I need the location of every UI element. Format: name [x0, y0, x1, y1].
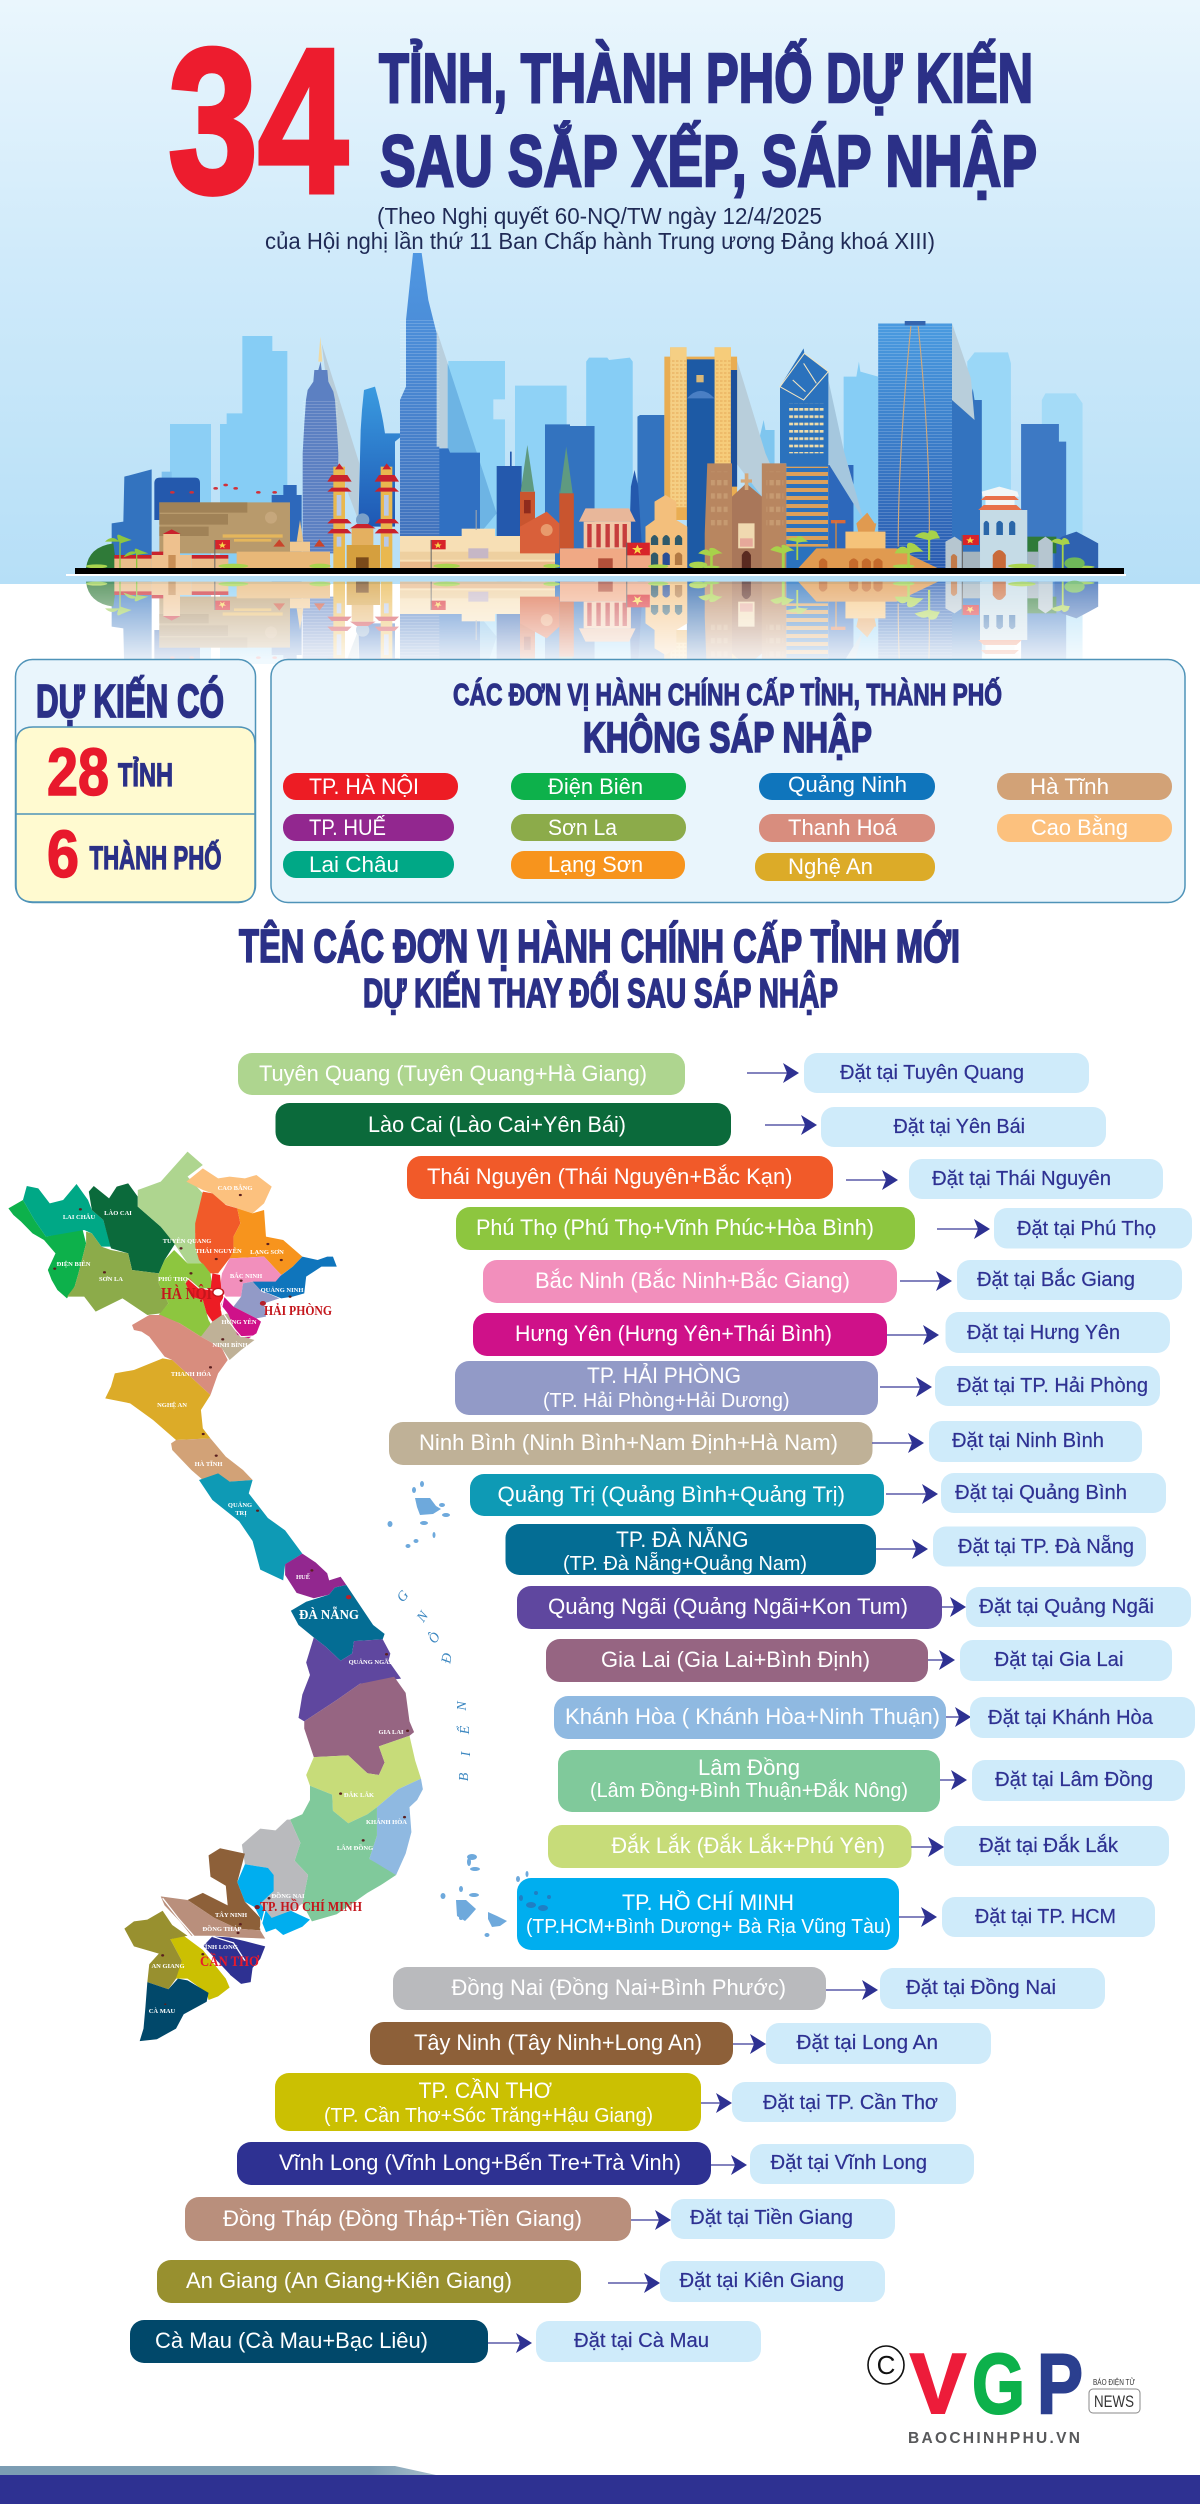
destination: [671, 2199, 895, 2239]
arrow: [946, 1707, 971, 1727]
arrow: [876, 1539, 928, 1559]
islands overlapping the Ho Chi Minh bar: [519, 1891, 551, 1911]
stat: 6 cities: 6: [47, 817, 79, 892]
letters VGP: P: [1037, 2337, 1083, 2432]
pill: Lai Chau: [283, 851, 454, 878]
copyright symbol: C: [877, 2350, 895, 2380]
bar: [185, 2197, 631, 2241]
bar: An Giang (An Giang+Kiên Giang): [186, 2268, 512, 2293]
destination: [766, 2023, 991, 2064]
map labels: TRỊ: [235, 1510, 247, 1517]
pill: Quang Ninh: [759, 772, 935, 800]
pill: Cao Bang: Cao Bằng: [1031, 815, 1128, 840]
destination: Đặt tại Quảng Ngãi: [979, 1596, 1154, 1618]
bar: Phú Thọ (Phú Thọ+Vĩnh Phúc+Hòa Bình): [476, 1215, 874, 1240]
map of Vietnam: [8, 1152, 529, 2041]
bar: [455, 1361, 878, 1415]
bar: [517, 1586, 942, 1629]
destination: [536, 2321, 761, 2362]
arrow: [631, 2210, 671, 2230]
bar: [389, 1422, 872, 1465]
map labels: KHÁNH HÒA: [366, 1818, 407, 1826]
bar: Gia Lai (Gia Lai+Bình Định): [601, 1647, 870, 1672]
bar: Đồng Nai (Đồng Nai+Bình Phước): [452, 1975, 786, 2000]
bar: Đắk Lắk (Đắk Lắk+Phú Yên): [612, 1833, 885, 1858]
news badge: [1089, 2376, 1140, 2413]
destination: Đặt tại Đồng Nai: [906, 1977, 1056, 1999]
map labels: TUYÊN QUANG: [163, 1237, 211, 1245]
row: Hung Yen: [473, 1312, 1170, 1356]
subtitle: của Hội nghị lần thứ 11 Ban Chấp hành Trung ương Đảng khoá XIII): [265, 228, 935, 254]
heading: khong sap nhap: KHÔNG SÁP NHẬP: [583, 713, 872, 762]
arrow: [887, 1325, 939, 1345]
destination: [972, 1760, 1185, 1801]
destination: [957, 1260, 1182, 1300]
map labels: ĐỒNG THÁP: [202, 1925, 242, 1933]
destination: [966, 1587, 1191, 1627]
map labels: HUẾ: [296, 1573, 310, 1581]
row: Thai Nguyen: [407, 1156, 1163, 1199]
arrow: [899, 1907, 937, 1927]
bar: Khánh Hòa ( Khánh Hòa+Ninh Thuận): [565, 1704, 940, 1729]
pill: Nghe An: [755, 853, 935, 881]
bar: [237, 2142, 711, 2185]
destination: Đặt tại Phú Thọ: [1017, 1218, 1156, 1240]
map labels: CẦN THƠ: [200, 1953, 259, 1970]
arrow: [846, 1170, 898, 1190]
map labels: NGHỆ AN: [157, 1401, 187, 1409]
map labels: PHÚ THỌ: [158, 1275, 188, 1283]
arrow: [826, 1980, 878, 2000]
bar: (TP.HCM+Bình Dương+ Bà Rịa Vũng Tàu): [526, 1916, 891, 1938]
map: north and north central regions: [8, 1152, 337, 1580]
islands: Hoang Sa: [388, 1481, 450, 1548]
pill: Ha Tinh: [997, 773, 1172, 800]
letters VGP: G: [972, 2337, 1025, 2432]
destination: [960, 1640, 1172, 1681]
sea label: Bien Dong: G: [394, 1588, 412, 1605]
ground line: [66, 568, 1126, 576]
bar: [506, 1524, 876, 1575]
map labels: [57, 1184, 407, 2015]
arrow: [900, 1271, 952, 1291]
pill: Lang Son: Lạng Sơn: [548, 852, 643, 877]
bar: [546, 1639, 928, 1682]
pill: Ha Noi: [283, 773, 458, 800]
arrow: [872, 1433, 924, 1453]
subtitle: [265, 203, 935, 254]
pill: Thanh Hoa: Thanh Hoá: [788, 815, 898, 840]
pill: Cao Bang: [997, 814, 1172, 842]
sea label: Bien Dong: I: [459, 1750, 474, 1757]
map labels: HƯNG YÊN: [221, 1318, 257, 1326]
bar: (TP. Hải Phòng+Hải Dương): [543, 1390, 790, 1412]
big number 34: 34: [168, 6, 348, 236]
letters VGP: V: [910, 2337, 966, 2432]
pill: Dien Bien: Điện Biên: [548, 774, 643, 799]
destination: [880, 1968, 1105, 2009]
row: Dong Thap: [185, 2197, 895, 2241]
row: Lao Cai: [276, 1103, 1106, 1147]
bar: [370, 2022, 733, 2065]
destination: Đặt tại Vĩnh Long: [770, 2152, 927, 2174]
pill: Hue: [283, 814, 454, 841]
bar: Vĩnh Long (Vĩnh Long+Bến Tre+Trà Vinh): [279, 2150, 681, 2175]
destination: Đặt tại Ninh Bình: [952, 1430, 1104, 1452]
panel: units not merged: [271, 660, 1185, 902]
row: Tay Ninh: [370, 2022, 991, 2065]
arrow: [765, 1115, 817, 1135]
destination: [970, 1697, 1195, 1738]
bar: [558, 1750, 940, 1812]
pill: Quang Ninh: Quảng Ninh: [788, 772, 907, 797]
bar: TP. CẦN THƠ: [418, 2078, 552, 2103]
map labels: NINH BÌNH: [212, 1341, 248, 1349]
map labels: THÁI NGUYÊN: [195, 1247, 242, 1255]
map labels: QUẢNG NGÃI: [349, 1658, 392, 1666]
sea label: Bien Dong: Đ: [439, 1652, 456, 1666]
bar: TP. HỒ CHÍ MINH: [622, 1890, 794, 1915]
skyline illustration: [86, 253, 1098, 569]
news badge: NEWS: [1094, 2392, 1134, 2411]
title: [379, 38, 1037, 202]
map labels: ĐÀ NẴNG: [299, 1605, 359, 1623]
map labels: VĨNH LONG: [200, 1943, 238, 1951]
heading: du kien co: DỰ KIẾN CÓ: [36, 675, 224, 727]
bar: Cà Mau (Cà Mau+Bạc Liêu): [155, 2328, 428, 2353]
sea label: Bien Dong: N: [455, 1701, 470, 1712]
bar: [393, 1967, 826, 2010]
copyright symbol: [868, 2346, 904, 2384]
arrow: [733, 2034, 766, 2054]
bar: [473, 1313, 887, 1356]
pill: Lang Son: [511, 851, 685, 879]
destination: [660, 2261, 885, 2302]
bar: Lào Cai (Lào Cai+Yên Bái): [368, 1112, 626, 1137]
destination: [946, 1312, 1170, 1353]
pill: Dien Bien: [511, 773, 686, 800]
row: Ninh Binh: [389, 1421, 1142, 1465]
row: Dong Nai: [393, 1967, 1105, 2010]
map labels: HÀ TĨNH: [195, 1460, 222, 1468]
destination: [994, 1208, 1192, 1248]
map labels: AN GIANG: [151, 1963, 185, 1970]
bar: Bắc Ninh (Bắc Ninh+Bắc Giang): [535, 1268, 850, 1293]
map labels: LẠNG SƠN: [250, 1249, 284, 1256]
row: An Giang: [157, 2260, 885, 2303]
destination: Đặt tại Cà Mau: [574, 2330, 709, 2352]
map labels: QUẢNG NINH: [261, 1286, 303, 1294]
bar: Tây Ninh (Tây Ninh+Long An): [414, 2030, 702, 2055]
letters VGP: [910, 2337, 1083, 2432]
destination: [909, 1159, 1163, 1199]
bar: [548, 1825, 912, 1868]
destination: Đặt tại Thái Nguyên: [932, 1168, 1111, 1190]
arrow: [880, 1377, 932, 1397]
destination: Đặt tại Long An: [796, 2032, 938, 2054]
pill: Ha Noi: TP. HÀ NỘI: [309, 774, 419, 799]
skyline: right half: [560, 321, 1098, 569]
bar: [470, 1474, 884, 1516]
arrow: [937, 1219, 990, 1239]
skyline reflection: [86, 580, 1098, 664]
bar: Tuyên Quang (Tuyên Quang+Hà Giang): [259, 1061, 647, 1086]
stat: 28 provinces: TỈNH: [118, 757, 173, 793]
bar: [275, 2073, 701, 2131]
bar: (TP. Đà Nẵng+Quảng Nam): [563, 1552, 807, 1575]
row: Hai Phong: [455, 1361, 1160, 1415]
destination: [941, 1473, 1166, 1513]
destination: Đặt tại TP. Cần Thơ: [763, 2092, 938, 2114]
destination: Đặt tại Kiên Giang: [680, 2270, 844, 2292]
row: Quang Tri: [470, 1473, 1166, 1516]
destination: Đặt tại Hưng Yên: [967, 1322, 1120, 1344]
news badge: BÁO ĐIỆN TỬ: [1093, 2376, 1135, 2387]
bar: [517, 1878, 899, 1950]
pill: Hue: TP. HUẾ: [309, 815, 386, 840]
stat: 6 cities: THÀNH PHỐ: [90, 840, 222, 876]
skyline: left half: [86, 253, 572, 568]
destination: Đặt tại Đắk Lắk: [979, 1834, 1119, 1857]
map labels: ĐỒNG NAI: [271, 1892, 305, 1900]
map: south central and south regions: [124, 1554, 423, 2041]
destination: Đặt tại Yên Bái: [894, 1116, 1025, 1138]
destination: [933, 1526, 1146, 1566]
heading: administrative units: CÁC ĐƠN VỊ HÀNH CHÍNH CẤP TỈNH, THÀNH PHỐ: [453, 676, 1002, 712]
subtitle: (Theo Nghị quyết 60-NQ/TW ngày 12/4/2025: [377, 203, 822, 229]
islands: Truong Sa: [440, 1854, 528, 1937]
arrow: [886, 1484, 938, 1504]
destination: Đặt tại TP. Hải Phòng: [957, 1375, 1148, 1397]
stat: 6 cities: [47, 817, 222, 892]
map labels: BẮC NINH: [230, 1272, 262, 1280]
row: Tuyen Quang: [238, 1053, 1089, 1095]
row: Phu Tho: [456, 1207, 1192, 1250]
map labels: CAO BẰNG: [218, 1184, 252, 1192]
bar: [554, 1696, 946, 1739]
arrow: [747, 1063, 799, 1083]
bar: Quảng Trị (Quảng Bình+Quảng Trị): [498, 1482, 845, 1507]
destination: Đặt tại Bắc Giang: [977, 1268, 1135, 1291]
destination: Đặt tại TP. HCM: [975, 1906, 1116, 1928]
bar: Đồng Tháp (Đồng Tháp+Tiền Giang): [223, 2206, 582, 2231]
site name: BAOCHINHPHU.VN: [908, 2430, 1080, 2447]
bar: Hưng Yên (Hưng Yên+Thái Bình): [515, 1321, 832, 1346]
destination: Đặt tại Lâm Đồng: [995, 1769, 1153, 1791]
arrow: [942, 1597, 966, 1617]
section heading: [239, 920, 960, 1016]
destination: [929, 1421, 1142, 1462]
arrow: [911, 1837, 944, 1857]
destination: [804, 1053, 1089, 1093]
bar: Thái Nguyên (Thái Nguyên+Bắc Kạn): [427, 1164, 792, 1189]
box: totals: [16, 727, 255, 902]
pill: Lai Chau: Lai Châu: [309, 852, 399, 877]
bar: [276, 1103, 731, 1146]
stat: 28 provinces: 28: [47, 735, 109, 810]
destination: Đặt tại TP. Đà Nẵng: [958, 1535, 1134, 1558]
map labels: CÀ MAU: [149, 2007, 176, 2015]
pill: Ha Tinh: Hà Tĩnh: [1030, 774, 1109, 799]
map labels: LÂM ĐỒNG: [337, 1844, 373, 1852]
bar: Lâm Đồng: [698, 1755, 800, 1780]
row: Vinh Long: [237, 2142, 974, 2185]
map labels: ĐIỆN BIÊN: [57, 1260, 91, 1268]
arrow: [928, 1650, 955, 1670]
bar: Quảng Ngãi (Quảng Ngãi+Kon Tum): [548, 1594, 908, 1619]
arrow: [608, 2273, 660, 2293]
map labels: GIA LAI: [378, 1729, 404, 1736]
map labels: SƠN LA: [99, 1276, 123, 1283]
map labels: HÀ NỘI: [161, 1284, 212, 1303]
destination: Đặt tại Tiền Giang: [690, 2207, 853, 2229]
pill: Nghe An: Nghệ An: [788, 854, 873, 879]
bar: (TP. Cần Thơ+Sóc Trăng+Hậu Giang): [324, 2105, 653, 2127]
bar: [483, 1260, 897, 1303]
destination: Đặt tại Tuyên Quang: [840, 1062, 1024, 1084]
row: Ho Chi Minh: [517, 1878, 1155, 1950]
map labels: LAI CHÂU: [63, 1213, 95, 1221]
row: Quang Ngai: [517, 1586, 1191, 1629]
section heading: DỰ KIẾN THAY ĐỔI SAU SÁP NHẬP: [363, 969, 838, 1016]
map labels: ĐẮK LẮK: [344, 1791, 374, 1799]
bar: [157, 2260, 581, 2303]
destination: Đặt tại Gia Lai: [994, 1649, 1124, 1671]
destination: [821, 1107, 1106, 1147]
map labels: TP. HỒ CHÍ MINH: [260, 1897, 362, 1915]
row: Gia Lai: [546, 1639, 1172, 1682]
sky background: [0, 0, 1200, 584]
pill: Son La: Sơn La: [548, 815, 618, 840]
bar: [407, 1156, 833, 1199]
destination: Đặt tại Quảng Bình: [955, 1482, 1127, 1504]
bar: TP. HẢI PHÒNG: [587, 1363, 741, 1388]
row: Dak Lak: [548, 1825, 1169, 1868]
sea label: Bien Dong: Ể: [456, 1725, 473, 1735]
sea label: Bien Dong: [394, 1588, 474, 1781]
map labels: QUẢNG: [228, 1501, 252, 1509]
sea label: Bien Dong: B: [457, 1772, 472, 1781]
map labels: HẢI PHÒNG: [264, 1302, 332, 1319]
destination: [732, 2082, 956, 2122]
row: Lam Dong: [558, 1750, 1185, 1812]
row: Bac Ninh: [483, 1260, 1182, 1303]
map labels: LÀO CAI: [104, 1209, 132, 1217]
bar: [130, 2320, 488, 2363]
arrow: [701, 2093, 732, 2113]
pill: Son La: [511, 814, 686, 841]
destination: [942, 1897, 1155, 1937]
panel: planned count: [16, 660, 256, 902]
map labels: TÂY NINH: [215, 1911, 247, 1919]
row: Ca Mau: [130, 2320, 761, 2363]
bar: (Lâm Đồng+Bình Thuận+Đắk Nông): [590, 1779, 908, 1802]
row: Khanh Hoa: [554, 1696, 1195, 1739]
pill: Thanh Hoa: [759, 814, 935, 842]
destination: [944, 1826, 1169, 1866]
bar: [456, 1207, 915, 1250]
map labels: THANH HÓA: [171, 1370, 211, 1378]
destination: Đặt tại Khánh Hòa: [988, 1707, 1154, 1729]
row: Da Nang: [506, 1524, 1146, 1575]
arrow: [488, 2333, 532, 2353]
arrow: [940, 1770, 967, 1790]
bar: TP. ĐÀ NẴNG: [616, 1527, 748, 1552]
destination: [935, 1366, 1160, 1406]
logo: VGP: [868, 2337, 1140, 2447]
sea label: Bien Dong: N: [414, 1608, 432, 1626]
bar: Ninh Bình (Ninh Bình+Nam Định+Hà Nam): [419, 1430, 838, 1455]
stat: 28 provinces: [47, 735, 173, 810]
arrow: [711, 2155, 747, 2175]
row: Can Tho: [275, 2073, 956, 2131]
destination: [750, 2144, 974, 2184]
bar: [238, 1053, 685, 1095]
footer band: [0, 2466, 1200, 2504]
sea label: Bien Dong: Ô: [424, 1629, 444, 1646]
